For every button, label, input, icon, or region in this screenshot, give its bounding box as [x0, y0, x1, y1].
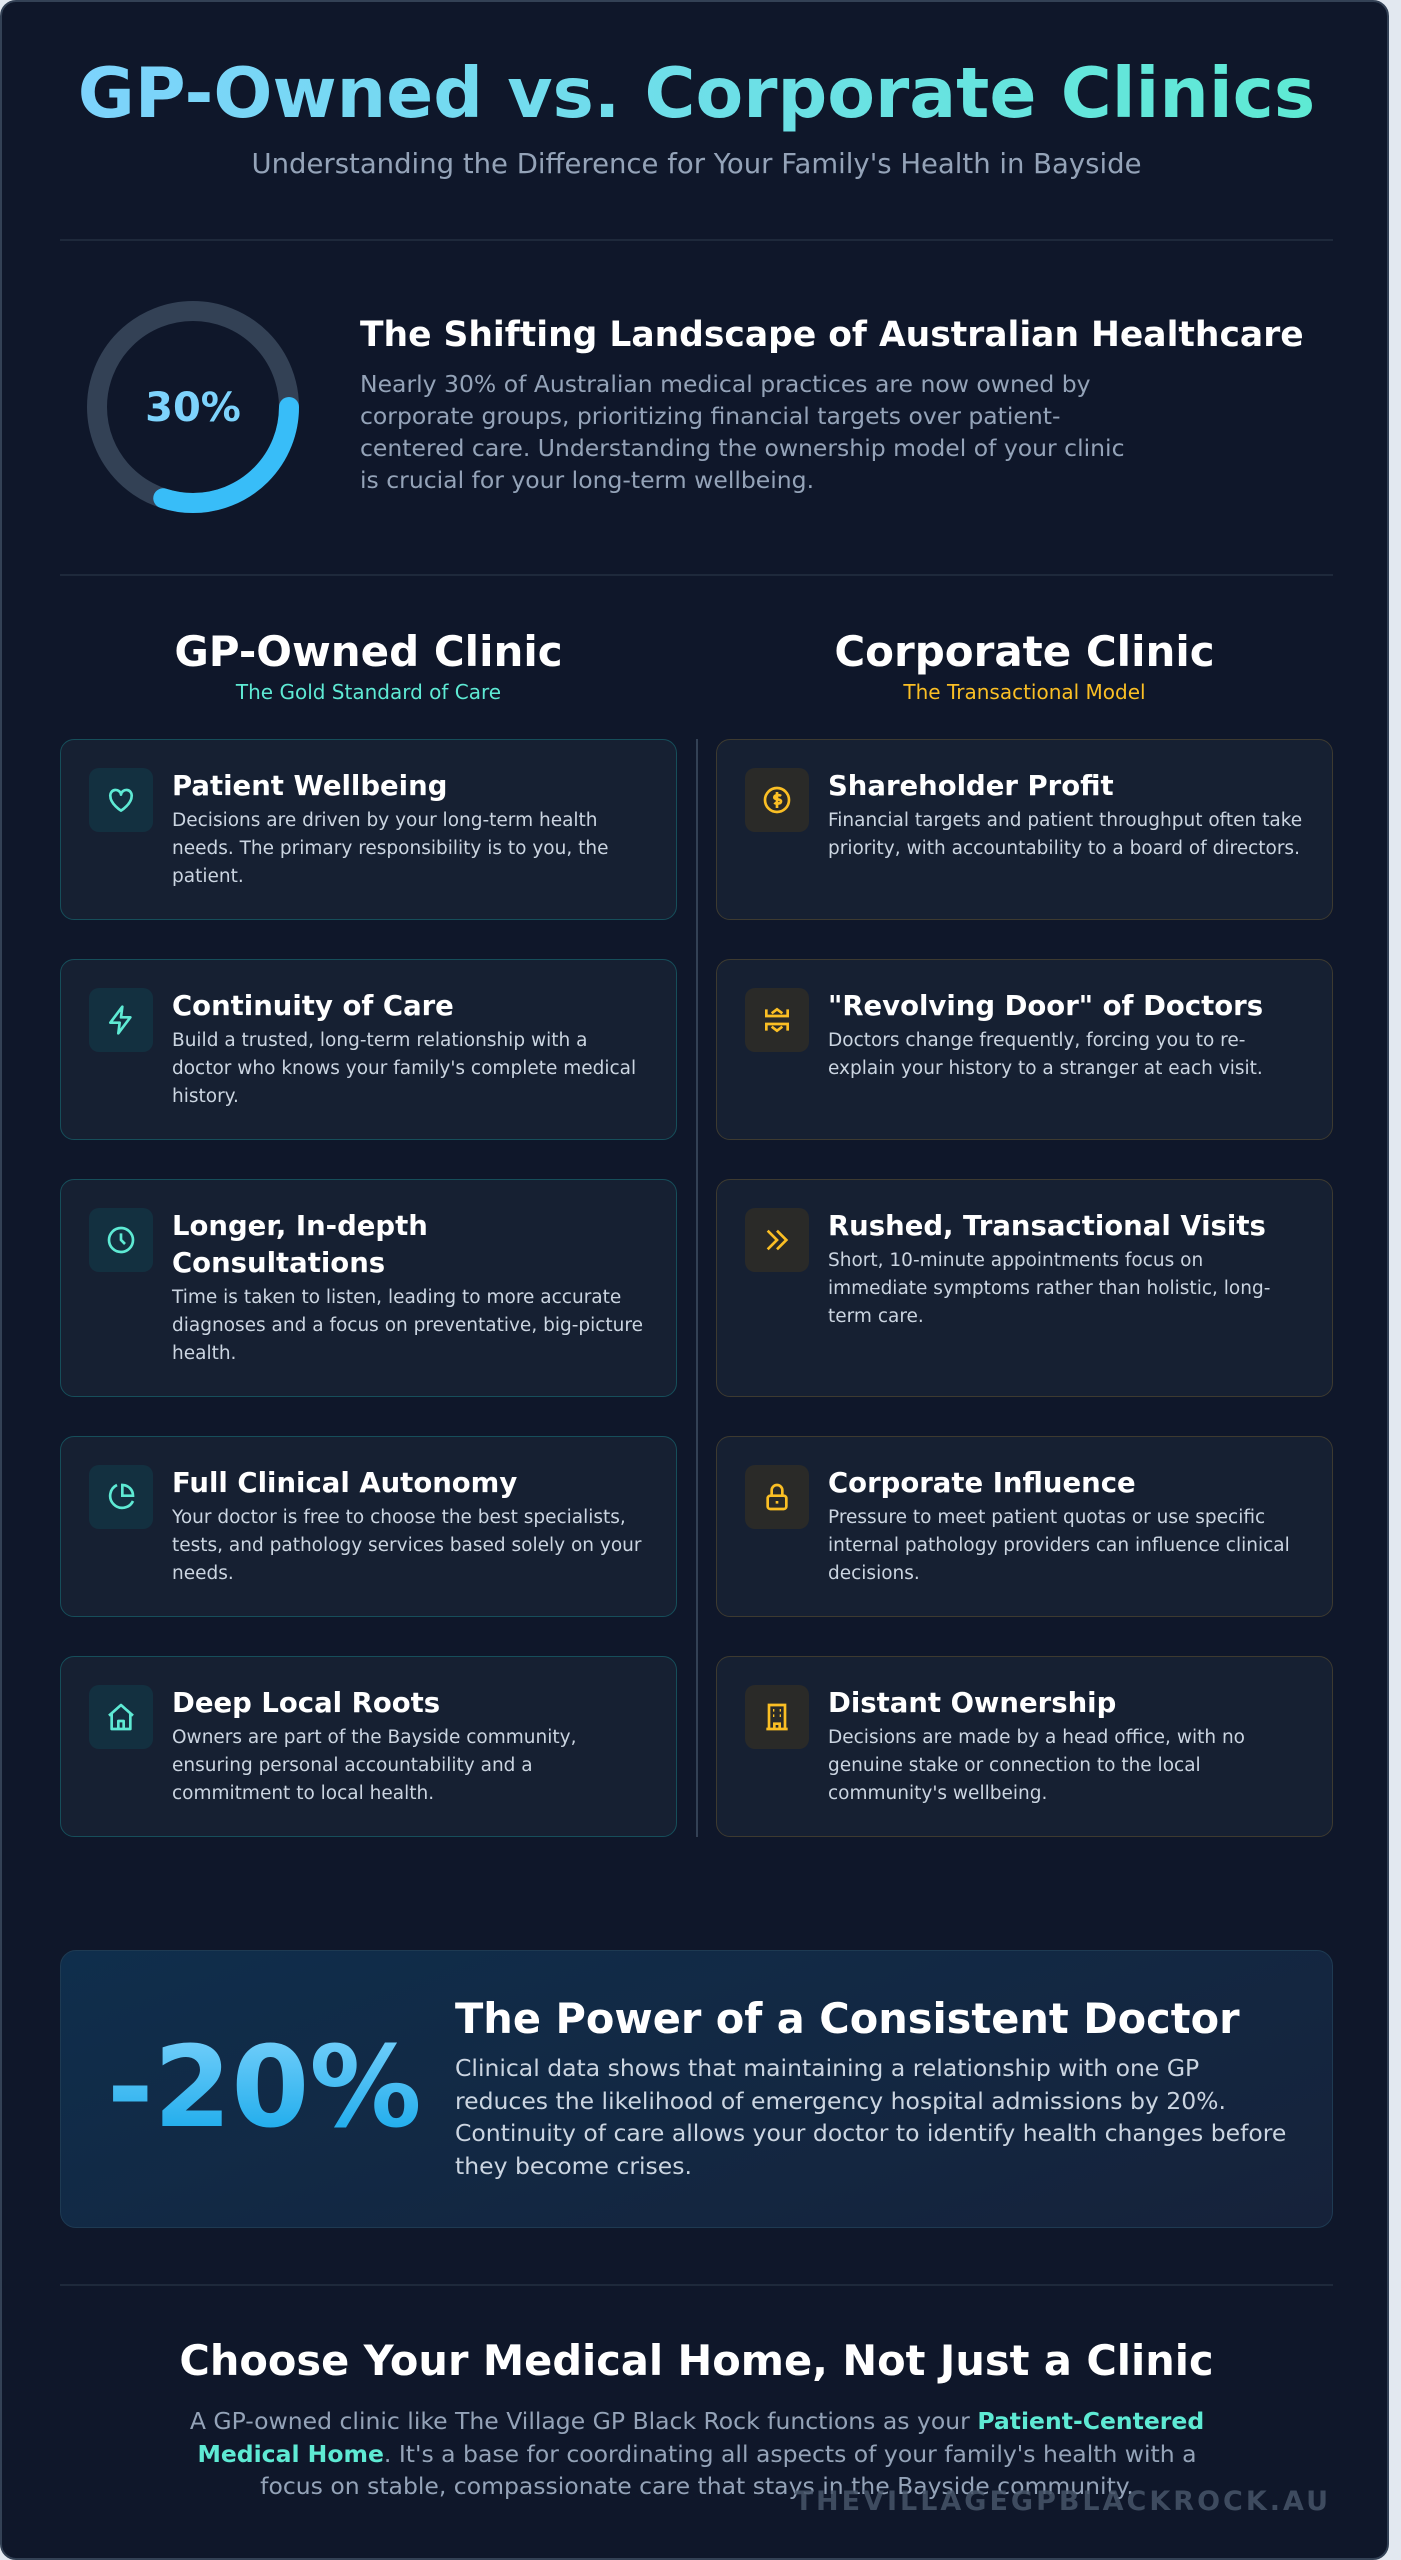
card: Distant Ownership: [716, 1656, 1333, 1837]
callout heading: The Power of a Consistent Doctor: [455, 1994, 1240, 2043]
card: Distant Ownership: Distant Ownership: [828, 1687, 1116, 1719]
donut chart: 30%: 30%: [145, 385, 241, 431]
card: Shareholder Profit: Shareholder Profit: [828, 770, 1114, 802]
closing heading: Choose Your Medical Home, Not Just a Clinic: [179, 2336, 1214, 2385]
card: Shareholder Profit: [716, 739, 1333, 920]
card: Corporate Influence: Corporate Influence: [828, 1467, 1136, 1499]
card: Corporate Influence: Pressure to meet patient quotas or use specific internal pathology providers can influence clinical decisions.: [828, 1507, 1290, 1584]
watermark: THEVILLAGEGPBLACKROCK.AU: [795, 2486, 1331, 2517]
card: Longer Consultations: Longer, In-depth Consultations: [172, 1210, 428, 1279]
card: Revolving Door: Doctors change frequently, forcing you to re-explain your history to a stranger at each visit.: [828, 1030, 1263, 1079]
card: Patient Wellbeing: Decisions are driven by your long-term health needs. The primary responsibility is to you, the patient.: [172, 810, 608, 887]
card: Distant Ownership: Decisions are made by a head office, with no genuine stake or connection to the local community's wellbeing.: [828, 1727, 1245, 1804]
intro heading: The Shifting Landscape of Australian Healthcare: [360, 315, 1304, 355]
card: Rushed Visits: [716, 1179, 1333, 1397]
card: Longer Consultations: [60, 1179, 677, 1397]
card: Revolving Door: "Revolving Door" of Doctors: [828, 990, 1263, 1022]
card: Deep Local Roots: [60, 1656, 677, 1837]
column heading: Corporate: The Transactional Model: [903, 680, 1146, 704]
column heading: GP-Owned: [174, 627, 563, 704]
column heading: Corporate: Corporate Clinic: [834, 627, 1215, 676]
card: Deep Local Roots: Deep Local Roots: [172, 1687, 440, 1719]
card: Longer Consultations: Time is taken to listen, leading to more accurate diagnoses and a focus on preventative, big-picture health.: [172, 1287, 643, 1364]
card: Full Clinical Autonomy: Your doctor is free to choose the best specialists, tests, and pathology services based solely on your needs.: [172, 1507, 642, 1584]
callout text: Clinical data shows that maintaining a relationship with one GP reduces the likelihood of emergency hospital admissions by 20%. Continuity of care allows your doctor to identify health changes before they become crises.: [455, 2054, 1286, 2180]
donut chart: 30%: [87, 301, 299, 513]
subtitle: Understanding the Difference for Your Family's Health in Bayside: [251, 148, 1142, 180]
card: Continuity of Care: Build a trusted, long-term relationship with a doctor who knows your family's complete medical history.: [172, 1030, 636, 1107]
card: Deep Local Roots: Owners are part of the Bayside community, ensuring personal accountability and a commitment to local health.: [172, 1727, 576, 1804]
card: Patient Wellbeing: [60, 739, 677, 920]
card: Full Clinical Autonomy: Full Clinical Autonomy: [172, 1467, 517, 1499]
closing text: A GP-owned clinic like The Village GP Black Rock functions as your Patient-Centered Medical Home. It's a base for coordinating all aspects of your family's health with a focus on stable, compassionate care that stays in the Bayside community.: [190, 2407, 1204, 2500]
column heading: Corporate: [834, 627, 1215, 704]
card: Patient Wellbeing: Patient Wellbeing: [172, 770, 447, 802]
card: Corporate Influence: [716, 1436, 1333, 1617]
card: Full Clinical Autonomy: [60, 1436, 677, 1617]
callout: consistent doctor: [60, 1950, 1333, 2228]
card: Shareholder Profit: Financial targets and patient throughput often take priority, with accountability to a board of directors.: [828, 810, 1302, 859]
card: Rushed Visits: Short, 10-minute appointments focus on immediate symptoms rather than holistic, long-term care.: [828, 1250, 1270, 1327]
card: Rushed Visits: Rushed, Transactional Visits: [828, 1210, 1266, 1242]
column heading: GP-Owned: The Gold Standard of Care: [236, 680, 501, 704]
intro text: Nearly 30% of Australian medical practices are now owned by corporate groups, prioritizing financial targets over patient-centered care. Understanding the ownership model of your clinic is crucial for your long-term wellbeing.: [360, 370, 1125, 494]
big stat: -20%: [107, 2023, 422, 2153]
card: Continuity of Care: Continuity of Care: [172, 990, 454, 1022]
card: Revolving Door: [716, 959, 1333, 1140]
card: Continuity of Care: [60, 959, 677, 1140]
title: GP-Owned vs. Corporate Clinics: [78, 53, 1315, 134]
column heading: GP-Owned: GP-Owned Clinic: [174, 627, 563, 676]
